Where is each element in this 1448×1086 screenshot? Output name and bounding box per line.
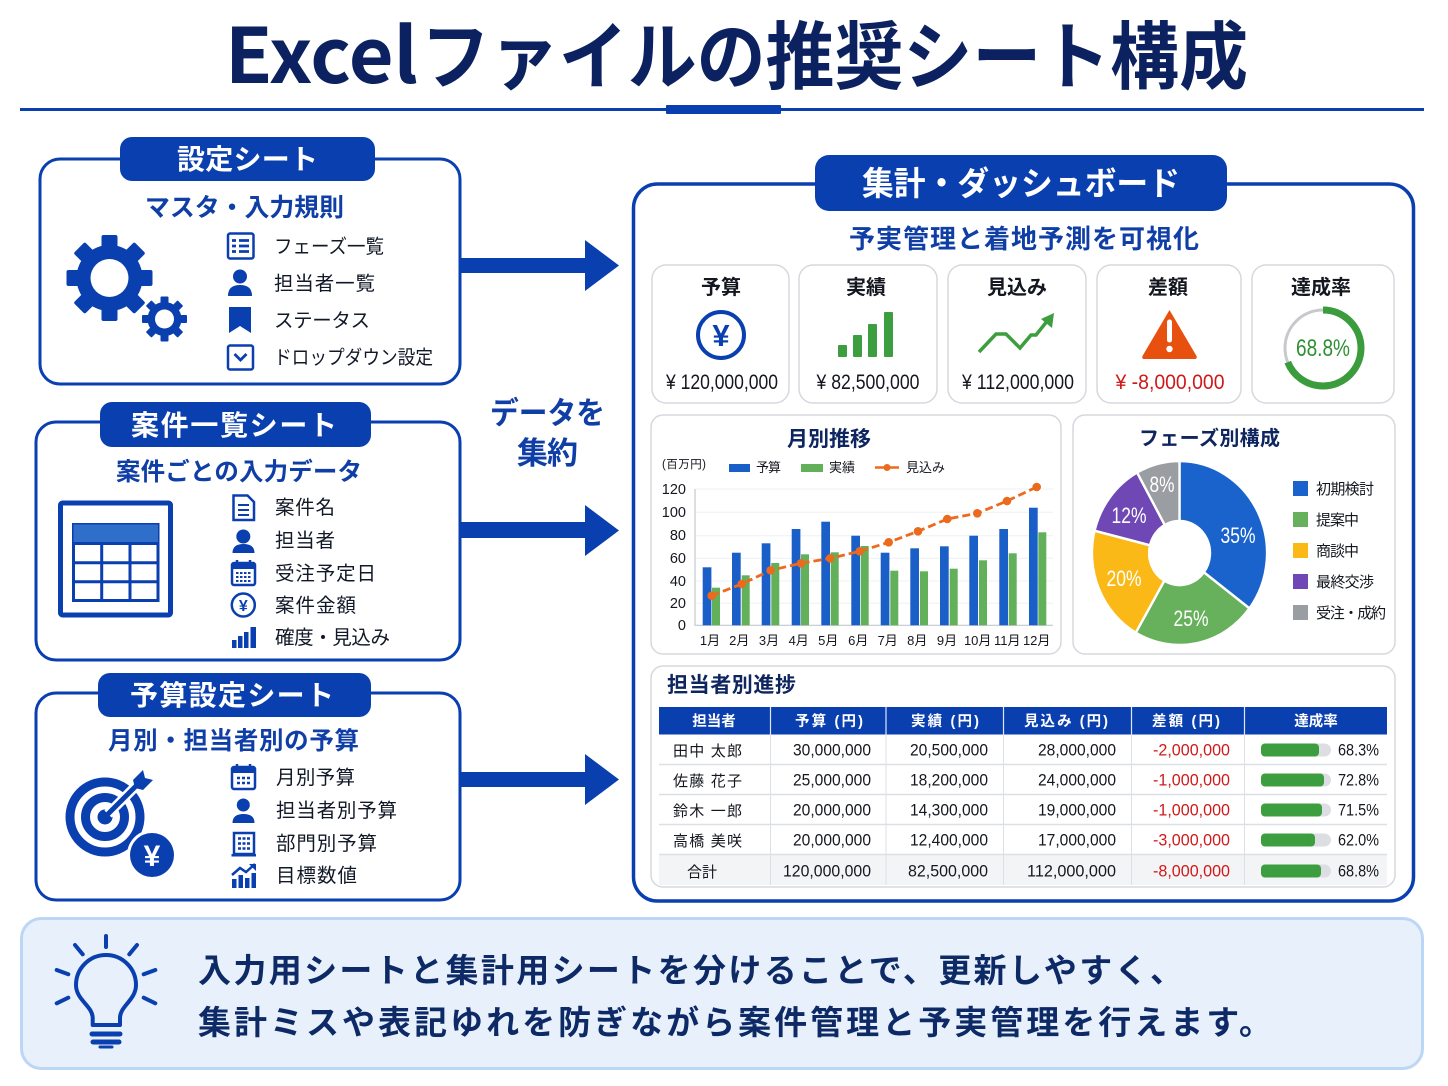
table header: 担当者 xyxy=(692,712,736,730)
table row: Tanaka: -2,000,000 xyxy=(1153,740,1230,760)
chart axes and gridlines: 0 xyxy=(678,618,686,634)
table row: total: 68.8% xyxy=(1338,862,1379,880)
table row: Takahashi xyxy=(673,830,1379,850)
title underline xyxy=(20,105,1424,114)
table row: Tanaka: 20,500,000 xyxy=(910,740,988,760)
chart axes and gridlines: 40 xyxy=(670,574,686,590)
table row: Suzuki: 19,000,000 xyxy=(1038,800,1116,820)
chart axes and gridlines xyxy=(662,482,1053,634)
table row: Suzuki: 鈴木 一郎 xyxy=(673,803,742,820)
actual bars xyxy=(712,532,1046,625)
label: aggregate data xyxy=(490,396,605,471)
item: project amount: ¥ xyxy=(239,598,248,615)
item: dropdown settings: ドロップダウン設定 xyxy=(274,347,433,369)
chart legend: 受注・成約 xyxy=(1316,605,1386,622)
title xyxy=(225,0,1248,105)
table row: Takahashi: -3,000,000 xyxy=(1153,830,1230,850)
donut gauge 68.8%: 68.8% xyxy=(1296,335,1350,362)
item: project amount: 案件金額 xyxy=(275,595,356,617)
table row: total: 82,500,000 xyxy=(908,862,988,880)
table header: 実績 (円) xyxy=(911,712,979,730)
item: owner: 担当者 xyxy=(275,530,335,552)
table row: Suzuki: -1,000,000 xyxy=(1153,800,1230,820)
table row: Sato: 24,000,000 xyxy=(1038,770,1116,790)
icon: rising bars xyxy=(838,312,893,357)
month labels: 5月 xyxy=(818,633,838,648)
heading tab: project list sheet xyxy=(100,402,371,447)
table header: 見込み (円) xyxy=(1024,713,1108,730)
donut gauge 68.8% xyxy=(1285,310,1361,386)
chart title: 月別推移 xyxy=(787,428,871,451)
panel: per-owner progress table xyxy=(651,666,1395,887)
month labels: 6月 xyxy=(848,633,868,648)
item: project name: 案件名 xyxy=(275,497,335,519)
item: department budget xyxy=(232,833,377,855)
table row: Tanaka: 30,000,000 xyxy=(793,740,871,760)
icon: trend arrow xyxy=(979,313,1054,352)
table header: 達成率 xyxy=(1294,712,1338,730)
month labels: 1月 xyxy=(700,633,720,648)
table row: Sato: -1,000,000 xyxy=(1153,770,1230,790)
title: ファイルの推奨シート構成 xyxy=(421,16,1248,99)
item: project name xyxy=(234,496,335,520)
KPI card: actual xyxy=(799,265,937,403)
chart legend: 予算 xyxy=(756,460,781,475)
table grid xyxy=(659,734,1387,885)
item: status: ステータス xyxy=(274,310,370,332)
heading tab: settings sheet: 設定シート xyxy=(177,144,318,175)
month labels: 10月 xyxy=(964,633,991,648)
chart legend: 提案中 xyxy=(1316,512,1359,529)
icon: light bulb xyxy=(57,936,155,1047)
item: owner list xyxy=(228,270,375,296)
panel: budget settings sheet xyxy=(36,673,460,900)
table header xyxy=(659,707,1387,734)
icon: yen coin: ¥ xyxy=(712,318,730,353)
donut chart xyxy=(1092,461,1267,645)
table row: Suzuki: 20,000,000 xyxy=(793,800,871,820)
chart axes and gridlines: 100 xyxy=(662,505,686,521)
item: project amount xyxy=(232,594,356,617)
label: aggregate data: 集約 xyxy=(517,436,578,471)
item: owner xyxy=(232,530,335,553)
icon: spreadsheet table xyxy=(60,503,170,615)
arrow: settings to dashboard xyxy=(460,240,619,291)
chart unit: (百万円) xyxy=(662,459,706,471)
heading tab: settings sheet xyxy=(120,137,375,181)
icon: target with yen xyxy=(70,770,177,880)
month labels: 4月 xyxy=(789,633,809,648)
donut chart: 25% xyxy=(1174,606,1208,631)
label: aggregate data: データを xyxy=(490,396,605,431)
donut chart: 12% xyxy=(1112,503,1146,528)
budget bars xyxy=(703,508,1038,625)
month labels: 7月 xyxy=(878,633,898,648)
item: department budget: 部門別予算 xyxy=(276,833,377,855)
table row: Sato xyxy=(673,770,1379,790)
KPI card: budget: 予算 xyxy=(701,276,741,299)
chart title: フェーズ別構成 xyxy=(1139,426,1280,450)
chart legend: 初期検討 xyxy=(1316,481,1374,498)
item: target figures xyxy=(232,864,357,888)
chart legend: 実績 xyxy=(829,460,855,475)
KPI card: actual: ¥ 82,500,000 xyxy=(816,371,920,394)
month labels xyxy=(700,633,1050,648)
KPI card: variance xyxy=(1097,265,1241,403)
chart legend: 見込み xyxy=(906,460,945,475)
table row: Sato: 72.8% xyxy=(1338,772,1379,790)
chart axes and gridlines: 120 xyxy=(662,482,686,498)
heading tab: dashboard xyxy=(815,155,1227,211)
item: monthly budget: 月別予算 xyxy=(276,767,355,789)
item: dropdown settings xyxy=(228,346,433,370)
chart legend: 最終交渉 xyxy=(1316,574,1374,591)
item: monthly budget xyxy=(232,764,355,789)
takeaway text: 集計ミスや表記ゆれを防ぎながら案件管理と予実管理を行えます。 xyxy=(198,1004,1272,1041)
KPI card: forecast: 見込み xyxy=(987,276,1047,299)
month labels: 3月 xyxy=(759,633,779,648)
table row: Takahashi: 17,000,000 xyxy=(1038,830,1116,850)
donut chart: 8% xyxy=(1150,472,1174,497)
table row: total: 112,000,000 xyxy=(1027,862,1116,880)
item: phase list xyxy=(228,234,384,258)
donut chart: 35% xyxy=(1220,523,1256,548)
item: status xyxy=(229,307,370,333)
table row: Suzuki: 14,300,000 xyxy=(910,800,988,820)
icon: gears xyxy=(66,235,187,342)
chart axes and gridlines: 80 xyxy=(670,528,686,544)
month labels: 2月 xyxy=(729,633,749,648)
arrow: budget to dashboard xyxy=(460,754,619,805)
KPI card: budget xyxy=(652,265,789,403)
month labels: 9月 xyxy=(937,633,957,648)
icon: target with yen: ¥ xyxy=(144,840,161,873)
table header: 予算 (円) xyxy=(795,712,863,730)
item: probability and forecast: 確度・見込み xyxy=(275,627,390,649)
table row: Takahashi: 12,400,000 xyxy=(910,830,988,850)
subtitle: visualize budget and forecast: 予実管理と着地予測を可視化 xyxy=(849,224,1199,254)
table row: Takahashi: 高橋 美咲 xyxy=(673,833,742,850)
table row: Tanaka: 28,000,000 xyxy=(1038,740,1116,760)
item: per-owner budget xyxy=(232,798,397,823)
month labels: 11月 xyxy=(994,633,1021,648)
donut chart: 20% xyxy=(1106,566,1142,591)
takeaway text xyxy=(198,952,1272,1041)
chart axes and gridlines: 20 xyxy=(670,596,686,612)
table row: Tanaka: 68.3% xyxy=(1338,742,1379,760)
KPI card: variance: 差額 xyxy=(1148,276,1188,299)
KPI card: variance: ¥ -8,000,000 xyxy=(1115,371,1224,394)
item: owner list: 担当者一覧 xyxy=(274,273,375,295)
KPI card: actual: 実績 xyxy=(846,276,886,299)
chart legend xyxy=(1293,481,1386,622)
chart axes and gridlines: 60 xyxy=(670,551,686,567)
item: phase list: フェーズ一覧 xyxy=(274,236,384,258)
subtitle: monthly and per-owner budget: 月別・担当者別の予算 xyxy=(108,727,359,755)
table row: total: 合計 xyxy=(687,864,717,881)
month labels: 12月 xyxy=(1023,633,1050,648)
month labels: 8月 xyxy=(907,633,927,648)
table title: 担当者別進捗 xyxy=(667,674,796,697)
panel: project list sheet xyxy=(36,402,460,660)
table row: total: 120,000,000 xyxy=(783,862,871,880)
KPI card: forecast xyxy=(948,265,1086,403)
chart legend: 商談中 xyxy=(1316,543,1359,560)
table row: Tanaka xyxy=(673,740,1379,760)
heading tab: budget settings sheet: 予算設定シート xyxy=(130,680,334,711)
chart legend xyxy=(729,460,945,475)
heading tab: dashboard: 集計・ダッシュボード xyxy=(862,165,1180,202)
panel: bottom takeaway xyxy=(22,918,1422,1068)
table row: Takahashi: 20,000,000 xyxy=(793,830,871,850)
forecast line xyxy=(707,483,1041,600)
KPI card: achievement rate: 達成率 xyxy=(1291,275,1351,299)
table header: 差額 (円) xyxy=(1152,712,1220,730)
icon: warning triangle xyxy=(1142,310,1197,359)
table row: Sato: 18,200,000 xyxy=(910,770,988,790)
heading tab: project list sheet: 案件一覧シート xyxy=(131,410,337,441)
item: target figures: 目標数値 xyxy=(276,865,357,887)
table row: Suzuki xyxy=(673,800,1379,820)
table row: Suzuki: 71.5% xyxy=(1338,802,1379,820)
KPI card: budget: ¥ 120,000,000 xyxy=(665,371,778,394)
panel: phase composition chart xyxy=(1073,415,1395,654)
subtitle: per-project input data: 案件ごとの入力データ xyxy=(116,457,362,486)
panel: settings sheet xyxy=(40,137,460,384)
takeaway text: 入力用シートと集計用シートを分けることで、更新しやすく、 xyxy=(198,952,1183,989)
item: per-owner budget: 担当者別予算 xyxy=(276,800,397,822)
subtitle: master and input rules: マスタ・入力規則 xyxy=(145,194,344,222)
table row: Sato: 25,000,000 xyxy=(793,770,871,790)
KPI card: forecast: ¥ 112,000,000 xyxy=(961,371,1074,394)
heading tab: budget settings sheet xyxy=(98,673,371,717)
item: expected order date: 受注予定日 xyxy=(275,563,376,585)
table row: total xyxy=(687,862,1379,881)
table row: total: -8,000,000 xyxy=(1153,862,1230,880)
table row: Tanaka: 田中 太郎 xyxy=(673,743,742,760)
arrow: project list to dashboard xyxy=(460,505,619,556)
item: expected order date xyxy=(232,560,376,585)
table row: Takahashi: 62.0% xyxy=(1338,832,1379,850)
panel: dashboard xyxy=(634,155,1414,901)
panel: monthly trend chart xyxy=(651,415,1061,654)
KPI card: achievement rate xyxy=(1252,265,1394,403)
table row: Sato: 佐藤 花子 xyxy=(673,773,742,790)
